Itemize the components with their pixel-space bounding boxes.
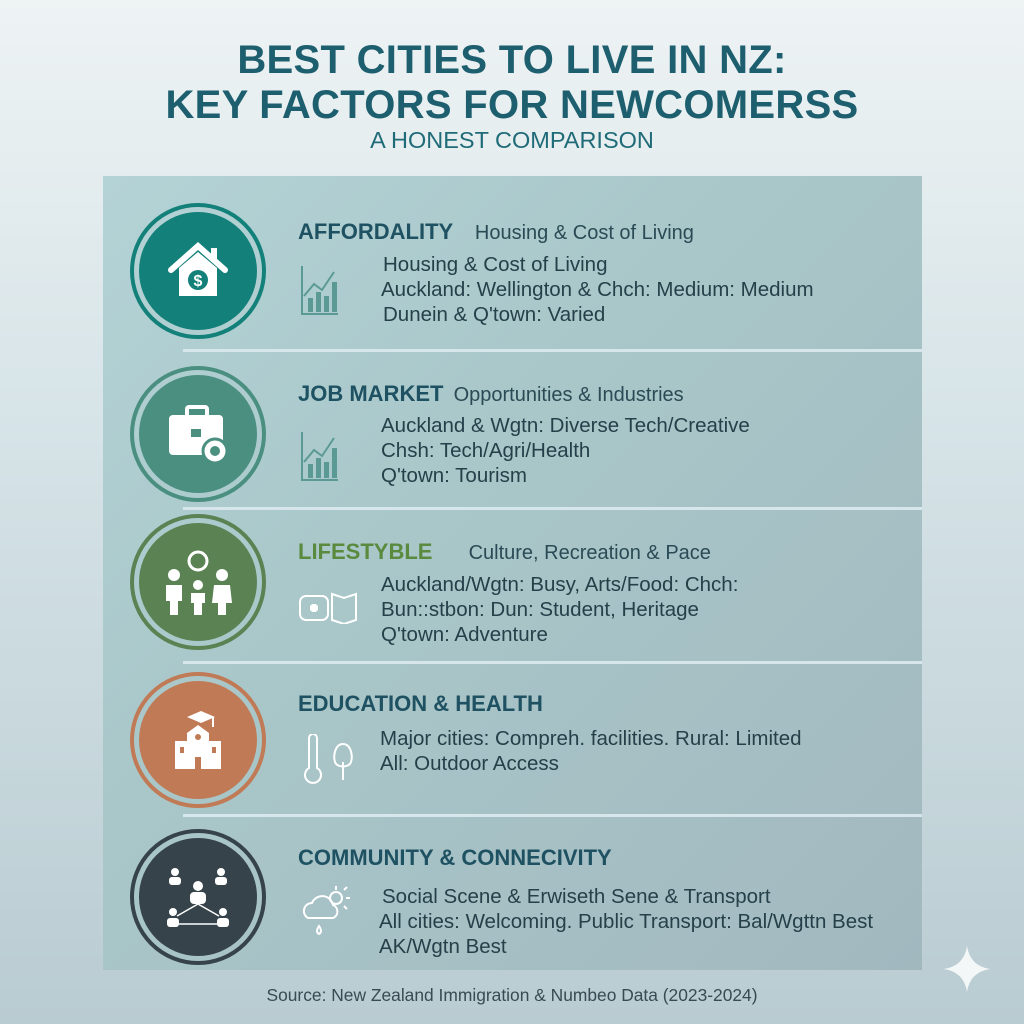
body text: Auckland & Wgtn: Diverse Tech/Creative <box>381 414 750 437</box>
body text: Auckland: Wellington & Chch: Medium: Medium <box>381 278 814 301</box>
icon: weather <box>302 886 350 935</box>
body text: Chsh: Tech/Agri/Health <box>381 439 590 462</box>
body text <box>381 253 814 326</box>
body text: Major cities: Compreh. facilities. Rural: Limited <box>380 727 802 750</box>
body text <box>381 573 738 646</box>
main panel <box>103 176 922 970</box>
heading: AFFORDALITY Housing & Cost of Living <box>298 219 694 244</box>
icon: briefcase circle <box>130 366 266 502</box>
icon: school circle <box>130 672 266 808</box>
icon: thermometer and tree <box>304 734 353 784</box>
body text: Housing & Cost of Living <box>383 253 607 276</box>
heading: EDUCATION & HEALTH <box>298 691 543 716</box>
icon: house circle <box>130 203 266 339</box>
icon: chart <box>301 266 338 315</box>
subtitle: A HONEST COMPARISON <box>370 127 654 153</box>
body text <box>379 885 873 958</box>
title: KEY FACTORS FOR NEWCOMERSS <box>165 83 859 127</box>
row: education <box>130 672 802 808</box>
icon: sparkle <box>944 946 990 992</box>
heading: LIFESTYBLE Culture, Recreation & Pace <box>298 539 711 564</box>
icon: chart <box>301 432 338 481</box>
body text: Q'town: Adventure <box>381 623 548 646</box>
icon: network circle <box>130 829 266 965</box>
row: job market <box>130 366 750 502</box>
icon: health book <box>299 592 357 624</box>
row: affordability <box>130 203 814 339</box>
icon: family circle <box>130 514 266 650</box>
heading: COMMUNITY & CONNECIVITY <box>298 845 612 870</box>
heading: JOB MARKET Opportunities & Industries <box>298 381 684 406</box>
body text <box>381 414 750 487</box>
body text: Q'town: Tourism <box>381 464 527 487</box>
body text: All: Outdoor Access <box>380 752 559 775</box>
body text: AK/Wgtn Best <box>379 935 507 958</box>
body text: Dunein & Q'town: Varied <box>383 303 605 326</box>
source: Source: New Zealand Immigration & Numbeo Data (2023-2024) <box>266 985 758 1005</box>
body text: All cities: Welcoming. Public Transport: Bal/Wgttn Best <box>379 910 873 933</box>
body text: Social Scene & Erwiseth Sene & Transport <box>382 885 771 908</box>
title: BEST CITIES TO LIVE IN NZ: <box>237 38 787 82</box>
body text: Auckland/Wgtn: Busy, Arts/Food: Chch: <box>381 573 738 596</box>
icon: house circle: $ <box>194 273 203 290</box>
body text: Bun::stbon: Dun: Student, Heritage <box>381 598 699 621</box>
row: community <box>130 829 873 965</box>
body text <box>380 727 802 775</box>
row: lifestyle <box>130 514 738 650</box>
title <box>165 38 859 127</box>
